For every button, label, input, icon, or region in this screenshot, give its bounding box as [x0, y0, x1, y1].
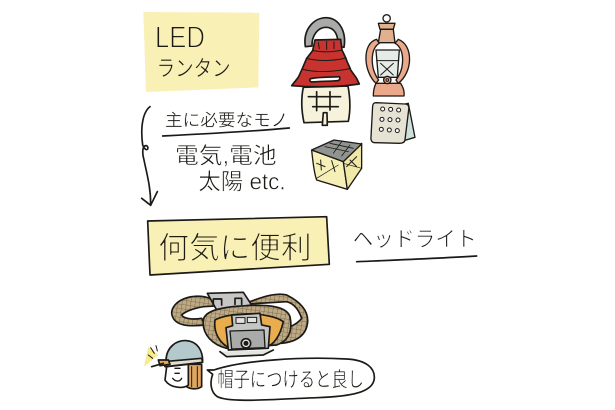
- text: power sources: [175, 142, 286, 194]
- text: main requirements: 主に必要なモノ: [165, 110, 288, 130]
- callout: good on a cap: 帽子につけると良し: [217, 369, 364, 392]
- panel: LED lantern heading: LED: [155, 21, 205, 55]
- lower section: headlight: [144, 217, 477, 400]
- icon: headlamp: [172, 292, 308, 357]
- arrow: downward loop: [142, 107, 157, 205]
- text: power sources: 電気,電池: [175, 142, 277, 168]
- panel: handy heading: [148, 217, 329, 275]
- heading: headlight: ヘッドライト: [353, 228, 477, 252]
- icon: oil lantern: [366, 15, 410, 96]
- panel: LED lantern heading: ランタン: [157, 56, 231, 81]
- icon: panel LED light: [371, 103, 415, 143]
- icon: person wearing cap with headlamp: [144, 341, 203, 389]
- panel: LED lantern heading: [143, 12, 259, 92]
- panel: handy heading: 何気に便利: [158, 231, 312, 265]
- upper section: LED lanterns: [142, 12, 415, 205]
- callout: good on a cap: [207, 358, 374, 400]
- icon: solar cube lantern: [312, 140, 362, 189]
- icon: red LED lantern: [292, 18, 359, 125]
- text: power sources: 太陽 etc.: [198, 168, 286, 194]
- heading: headlight: [353, 228, 477, 262]
